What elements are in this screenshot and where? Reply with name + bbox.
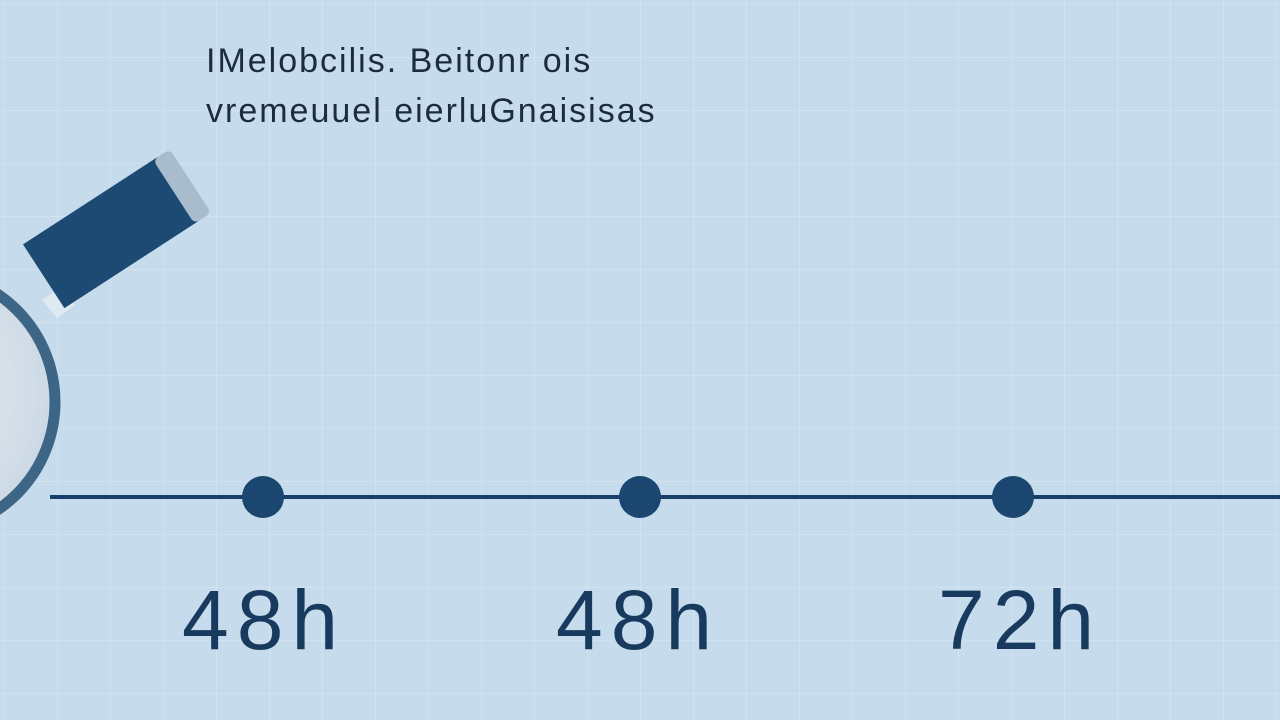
title: IMelobcilis. Beitonr ois [206, 42, 592, 80]
label 48h second: 48h [556, 573, 720, 667]
label 48h: 48h [182, 573, 346, 667]
subtitle: vremeuuel eierluGnaisisas [206, 92, 657, 130]
label 72h: 72h [938, 573, 1102, 667]
